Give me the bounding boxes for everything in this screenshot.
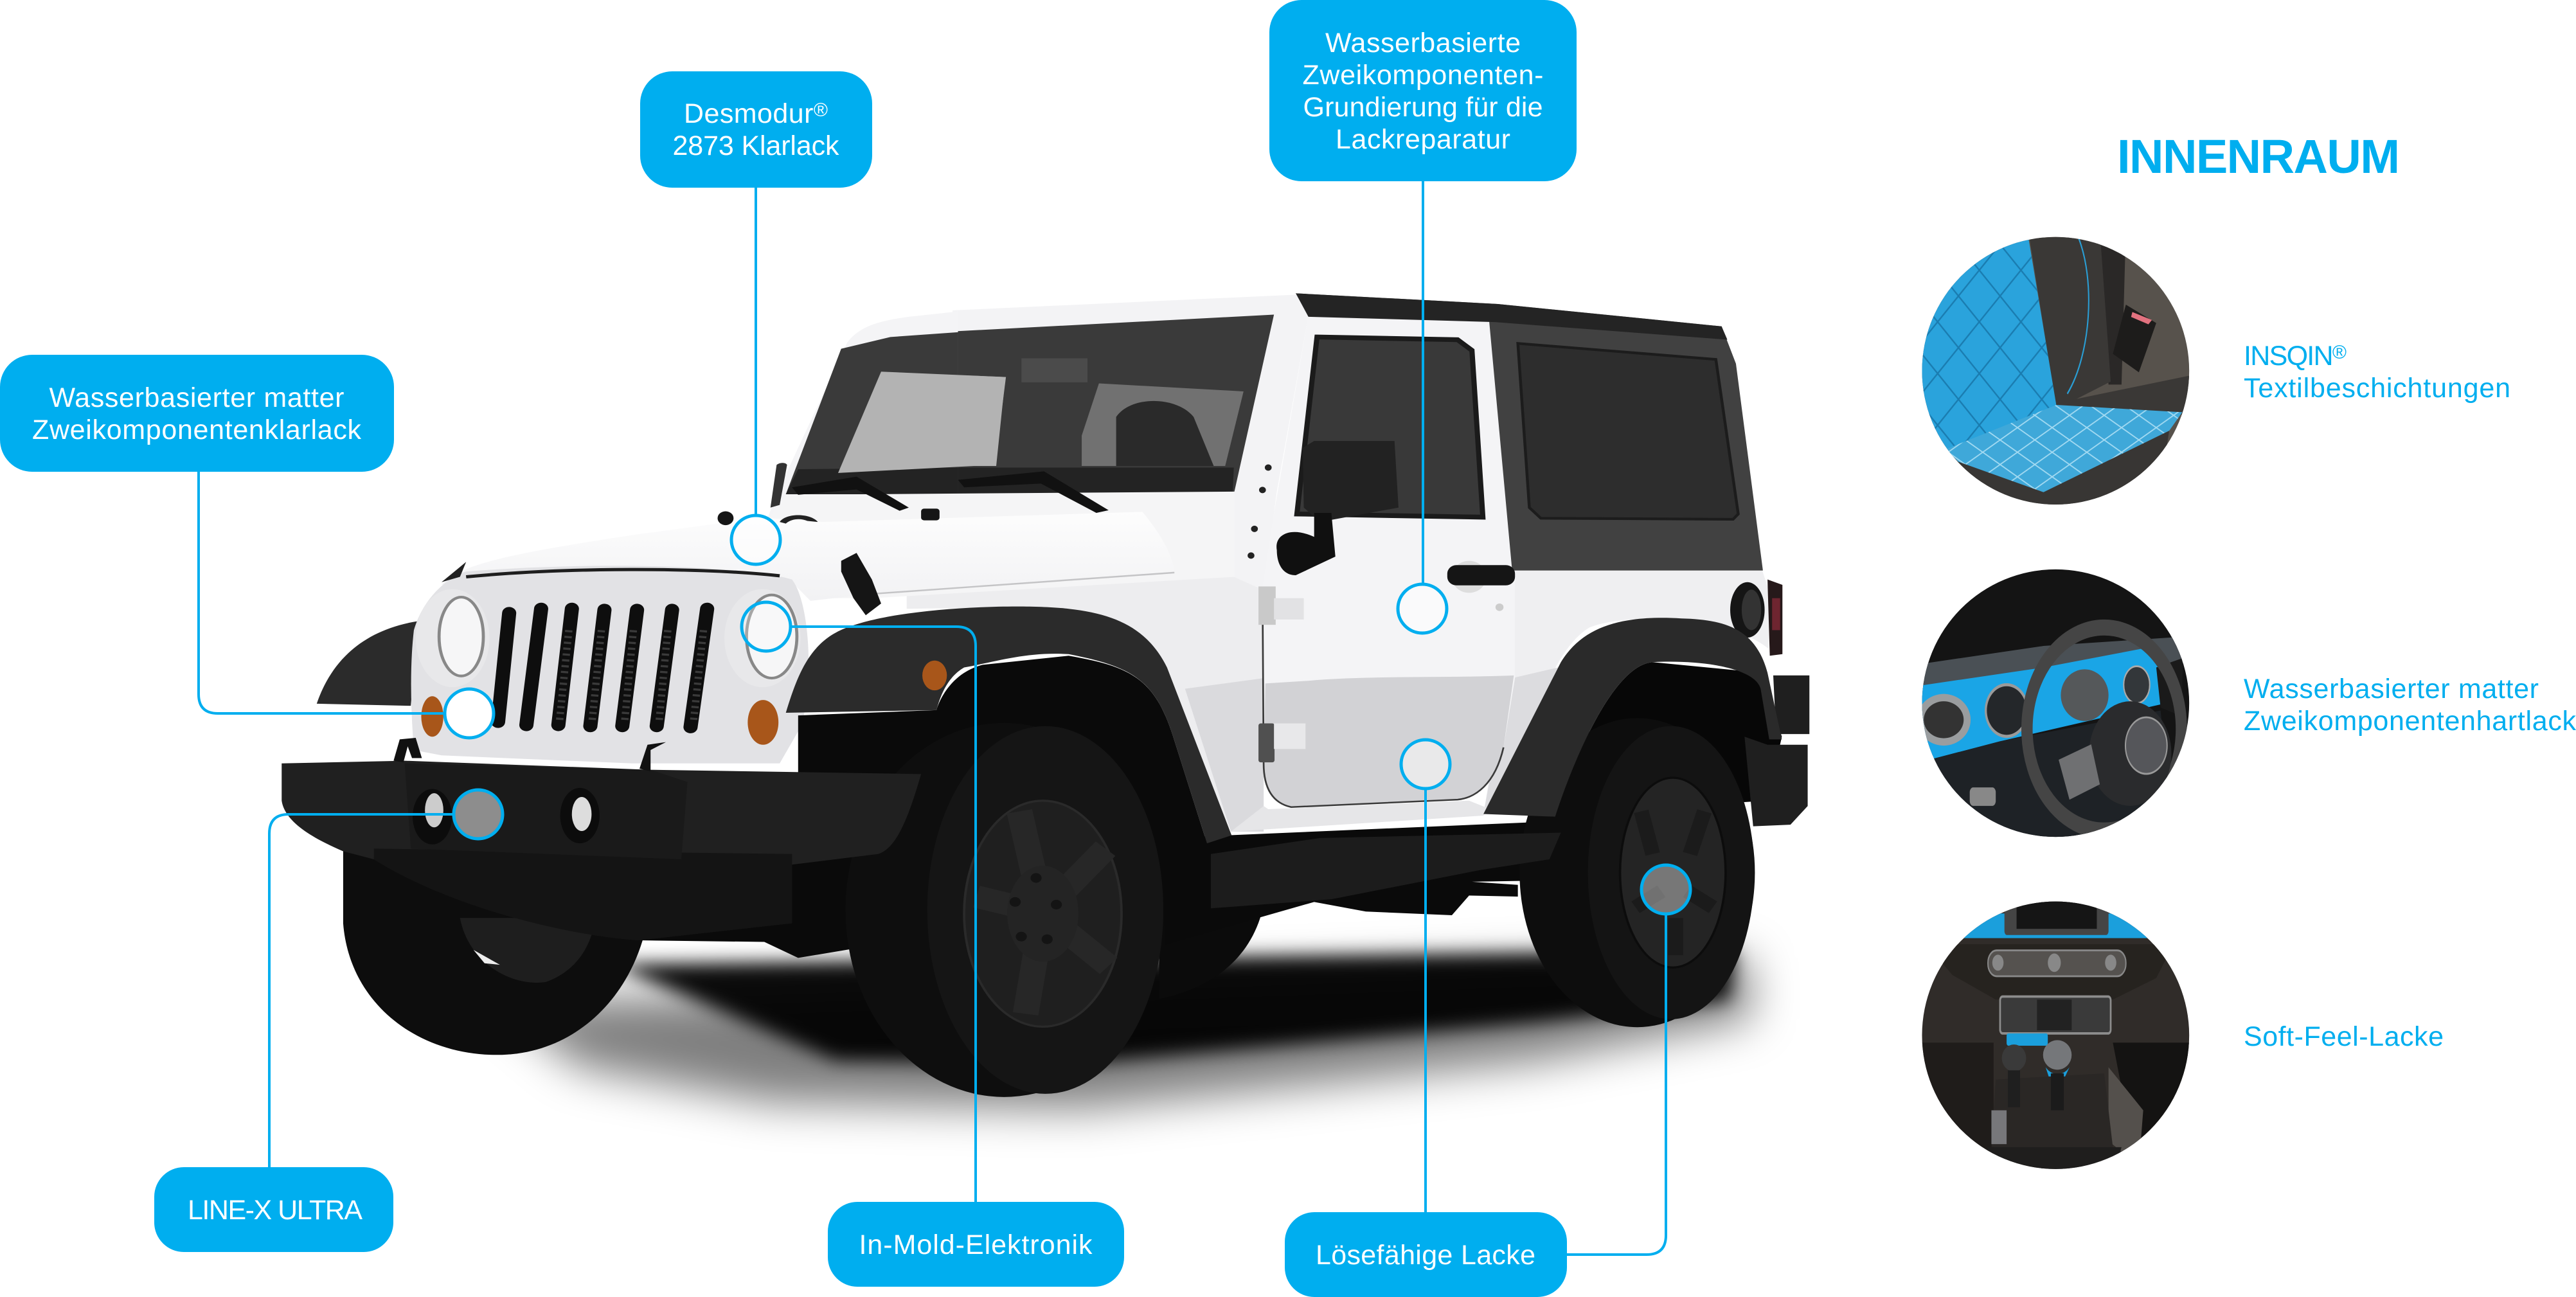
callout: In-Mold-Elektronik: In-Mold-Elektronik xyxy=(859,1230,1093,1260)
callout: Desmodur: Desmodur xyxy=(684,98,813,129)
callout: Lösefähige Lacke: Lösefähige Lacke xyxy=(1316,1240,1535,1271)
callout: Lösefähige Lacke xyxy=(1285,1212,1567,1297)
callout: Wasserbasierter matter Zweikomponentenklarlack: Zweikomponentenklarlack xyxy=(32,415,361,445)
label: Zweikomponentenhartlack: Zweikomponentenhartlack xyxy=(2244,706,2576,737)
callout markers xyxy=(445,515,1690,914)
callout: Wasserbasierte Grundierung xyxy=(1269,0,1577,181)
callout: LINE-X ULTRA xyxy=(154,1167,393,1252)
label: INSQIN xyxy=(2244,341,2510,404)
callout: Wasserbasierter matter Zweikomponentenklarlack xyxy=(0,355,394,472)
callout: LINE-X ULTRA: LINE-X ULTRA xyxy=(188,1195,362,1226)
label: Zweikomponentenhartlack xyxy=(2244,674,2576,737)
callout: Desmodur: ® xyxy=(814,100,828,121)
callout: Wasserbasierte Grundierung: Grundierung für die xyxy=(1303,92,1543,123)
label: INSQIN: Textilbeschichtungen xyxy=(2244,373,2510,404)
photo: console xyxy=(1918,895,2196,1178)
ground shadow xyxy=(501,951,1751,1109)
leader lines xyxy=(199,181,1666,1255)
callout: Wasserbasierter matter Zweikomponentenklarlack: Wasserbasierter matter xyxy=(49,382,344,413)
callout: Desmodur: 2873 Klarlack xyxy=(672,130,839,161)
label: Soft-Feel-Lacke: Soft-Feel-Lacke xyxy=(2244,1021,2444,1052)
callout: Wasserbasierte Grundierung: Wasserbasierte xyxy=(1325,28,1521,58)
label: INSQIN: INSQIN xyxy=(2244,341,2334,371)
label: INSQIN: ® xyxy=(2332,342,2347,363)
heading: Innenraum: INNENRAUM xyxy=(2117,130,2400,183)
jeep illustration xyxy=(282,293,1809,1109)
photo: dashboard xyxy=(1917,563,2196,846)
label: Zweikomponentenhartlack: Wasserbasierter matter xyxy=(2244,674,2539,704)
jeep side and rear body xyxy=(907,293,1809,1027)
callout: Wasserbasierte Grundierung: Lackreparatur xyxy=(1336,124,1510,155)
callout: Desmodur xyxy=(640,71,872,188)
jeep front section xyxy=(282,312,1235,1097)
photo: seat xyxy=(1918,231,2196,514)
callout: Wasserbasierte Grundierung: Zweikomponenten- xyxy=(1302,60,1544,91)
callout: In-Mold-Elektronik xyxy=(828,1202,1124,1287)
interior photos xyxy=(1917,231,2196,1178)
